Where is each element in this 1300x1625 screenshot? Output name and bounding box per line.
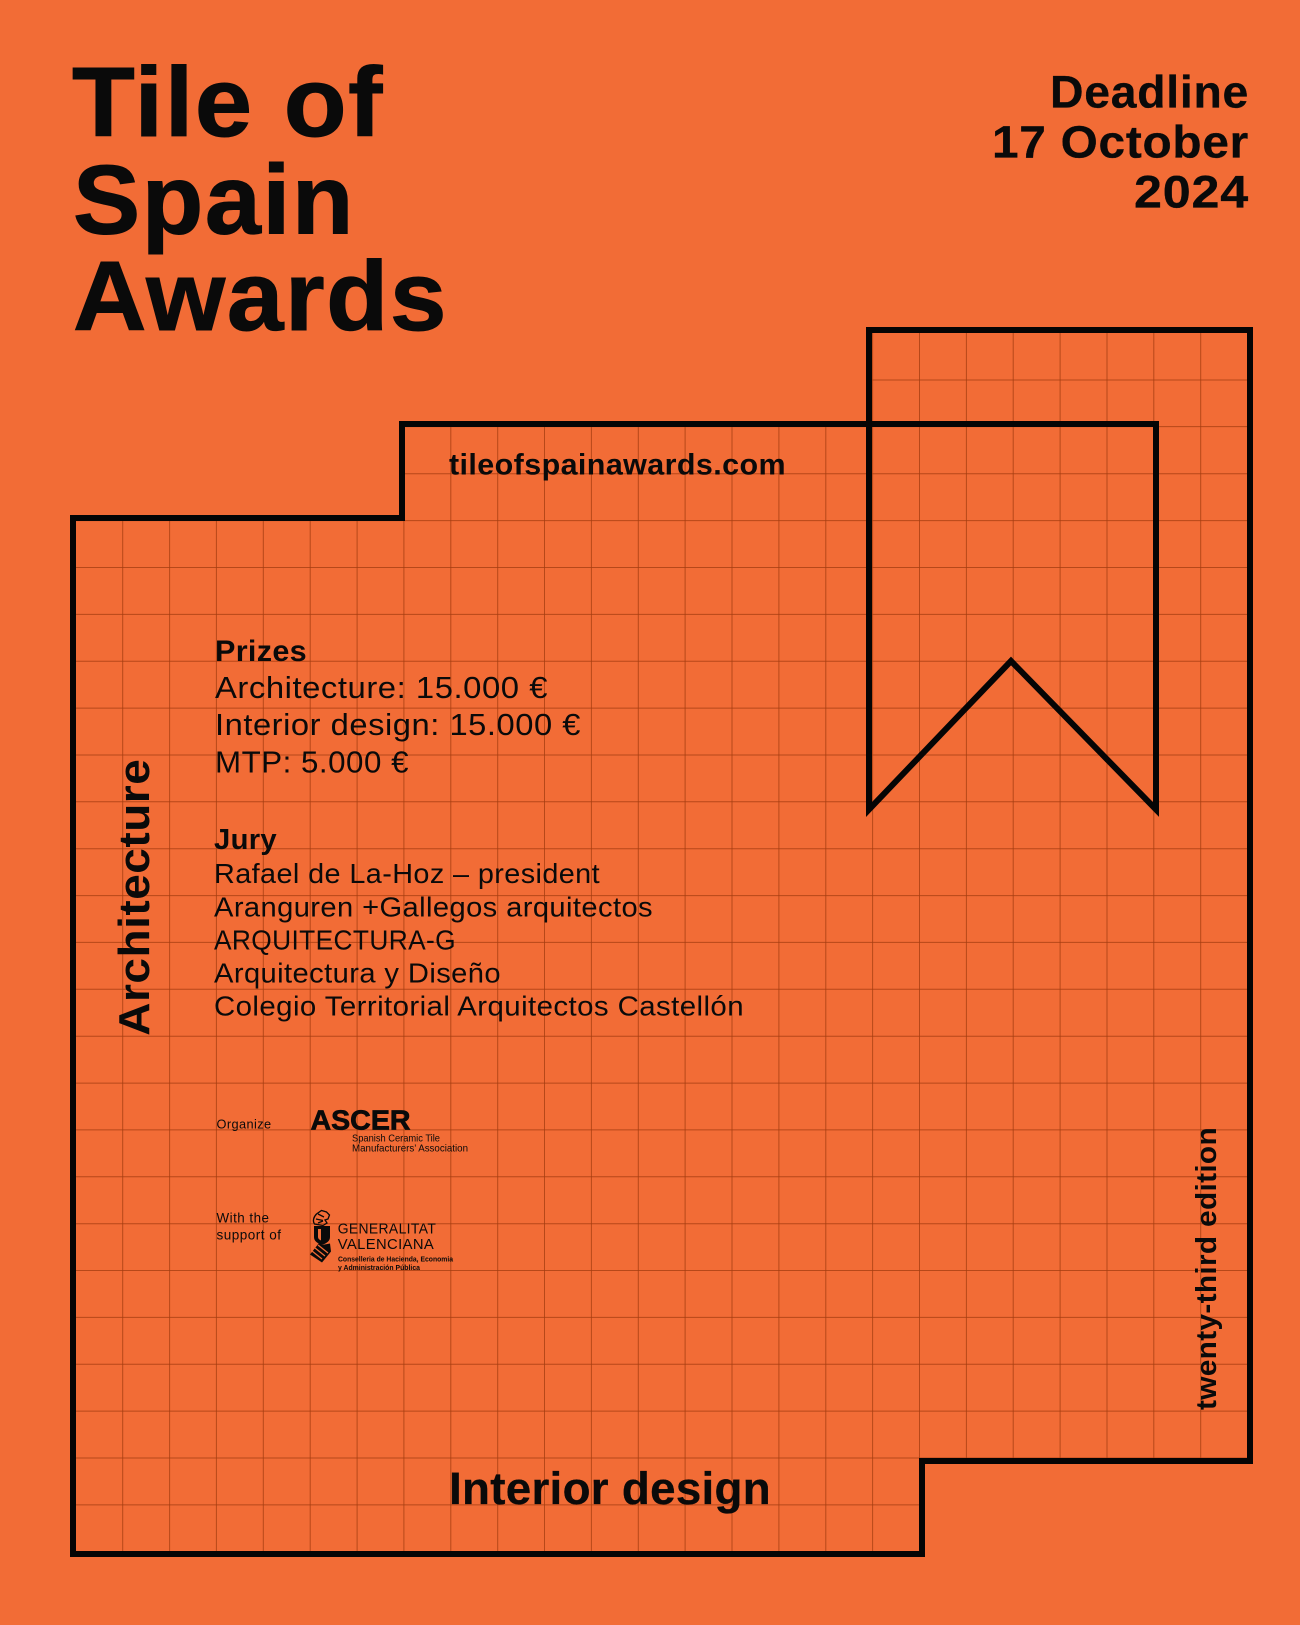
- logo: ascer: ASCER: [310, 1104, 411, 1135]
- frame: bookmark ribbon: [869, 330, 1156, 810]
- title: [72, 47, 448, 351]
- logo: ascer: Manufacturers’ Association: [352, 1144, 468, 1155]
- support label: support of: [216, 1226, 282, 1242]
- prizes block: Architecture: 15.000 €: [215, 671, 548, 705]
- logo: ascer: Spanish Ceramic Tile: [352, 1134, 440, 1145]
- deadline: 17 October: [992, 116, 1249, 167]
- support label: [216, 1210, 282, 1242]
- support label: With the: [216, 1210, 270, 1226]
- logo: generalitat valenciana coat of arms: [310, 1210, 331, 1262]
- logo: generalitat valenciana wordmark: GENERALITAT: [338, 1221, 436, 1238]
- jury block: [214, 824, 744, 1022]
- logo: generalitat valenciana wordmark: y Administración Pública: [338, 1263, 421, 1272]
- jury block: Arquitectura y Diseño: [214, 958, 501, 989]
- title: Awards: [73, 241, 448, 351]
- website url: tileofspainawards.com: [449, 448, 786, 481]
- prizes block: [215, 635, 581, 780]
- jury block: Rafael de La-Hoz – president: [214, 858, 600, 889]
- logo: generalitat valenciana wordmark: Conselleria de Hacienda, Economia: [338, 1254, 454, 1263]
- tile grid: [70, 320, 1255, 1560]
- jury block: ARQUITECTURA-G: [214, 924, 456, 955]
- title: Tile of: [72, 47, 384, 157]
- jury block: Jury: [214, 824, 277, 856]
- label: interior design: Interior design: [449, 1463, 771, 1514]
- jury block: Colegio Territorial Arquitectos Castellón: [214, 991, 744, 1022]
- logo: generalitat valenciana wordmark: [338, 1221, 454, 1272]
- prizes block: Prizes: [215, 635, 307, 668]
- deadline: 2024: [1134, 166, 1249, 217]
- deadline: [992, 66, 1249, 217]
- title: Spain: [73, 144, 355, 254]
- logo: generalitat valenciana wordmark: VALENCIANA: [338, 1236, 434, 1253]
- vertical label: architecture: Architecture: [110, 759, 159, 1036]
- organizer label: Organize: [216, 1117, 272, 1132]
- jury block: Aranguren +Gallegos arquitectos: [214, 891, 653, 922]
- prizes block: Interior design: 15.000 €: [215, 708, 581, 742]
- vertical label: edition: twenty-third edition: [1191, 1127, 1223, 1410]
- prizes block: MTP: 5.000 €: [215, 746, 409, 780]
- logo: ascer: [310, 1104, 468, 1155]
- deadline: Deadline: [1050, 66, 1249, 117]
- frame: outer stepped tile outline: [73, 330, 1250, 1554]
